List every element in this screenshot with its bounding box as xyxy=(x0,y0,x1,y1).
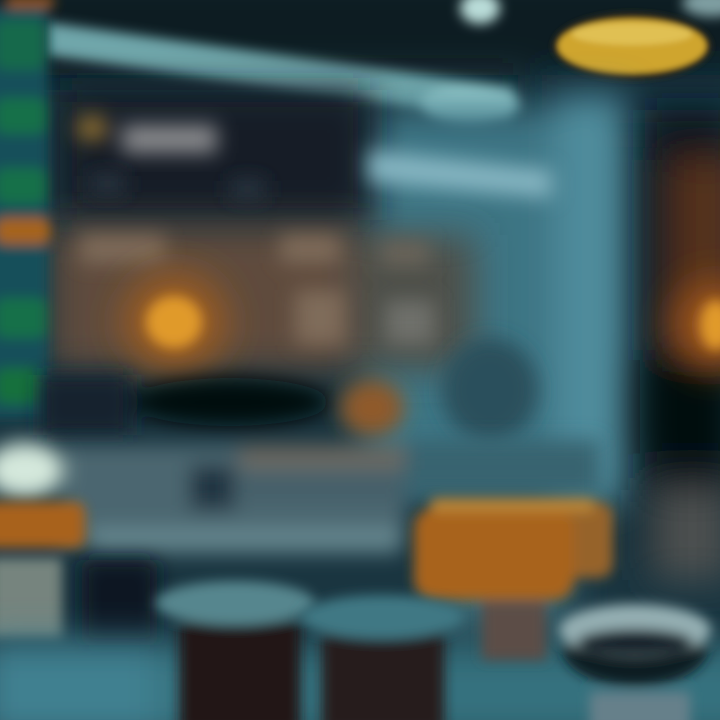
large orange cup xyxy=(414,498,613,660)
left orange cup xyxy=(0,502,85,638)
pendant lamp xyxy=(552,12,712,80)
bottom teal table xyxy=(0,565,720,720)
left green sign strip xyxy=(0,0,55,418)
dark cup centre right xyxy=(300,595,464,720)
wall sign smudge xyxy=(368,150,552,198)
ceiling lights xyxy=(460,0,720,24)
orange wall glow xyxy=(123,272,227,372)
light strip xyxy=(45,22,520,125)
counter bands xyxy=(60,440,600,553)
teal wall panel xyxy=(365,95,630,505)
dark counter shadow xyxy=(40,338,538,442)
dark cup centre left xyxy=(155,581,315,720)
board heading smudge xyxy=(76,115,217,153)
menu text smudges xyxy=(80,175,435,345)
dark jar xyxy=(82,560,157,645)
dark menu board xyxy=(60,90,370,220)
ceiling xyxy=(0,0,720,135)
bowl lower right xyxy=(559,604,711,720)
right dark column and warm window xyxy=(640,110,720,580)
right orange glow xyxy=(673,280,720,370)
white glow lower left xyxy=(0,442,65,498)
small orange cup on counter xyxy=(340,380,404,436)
warm brown menu area xyxy=(50,225,475,370)
